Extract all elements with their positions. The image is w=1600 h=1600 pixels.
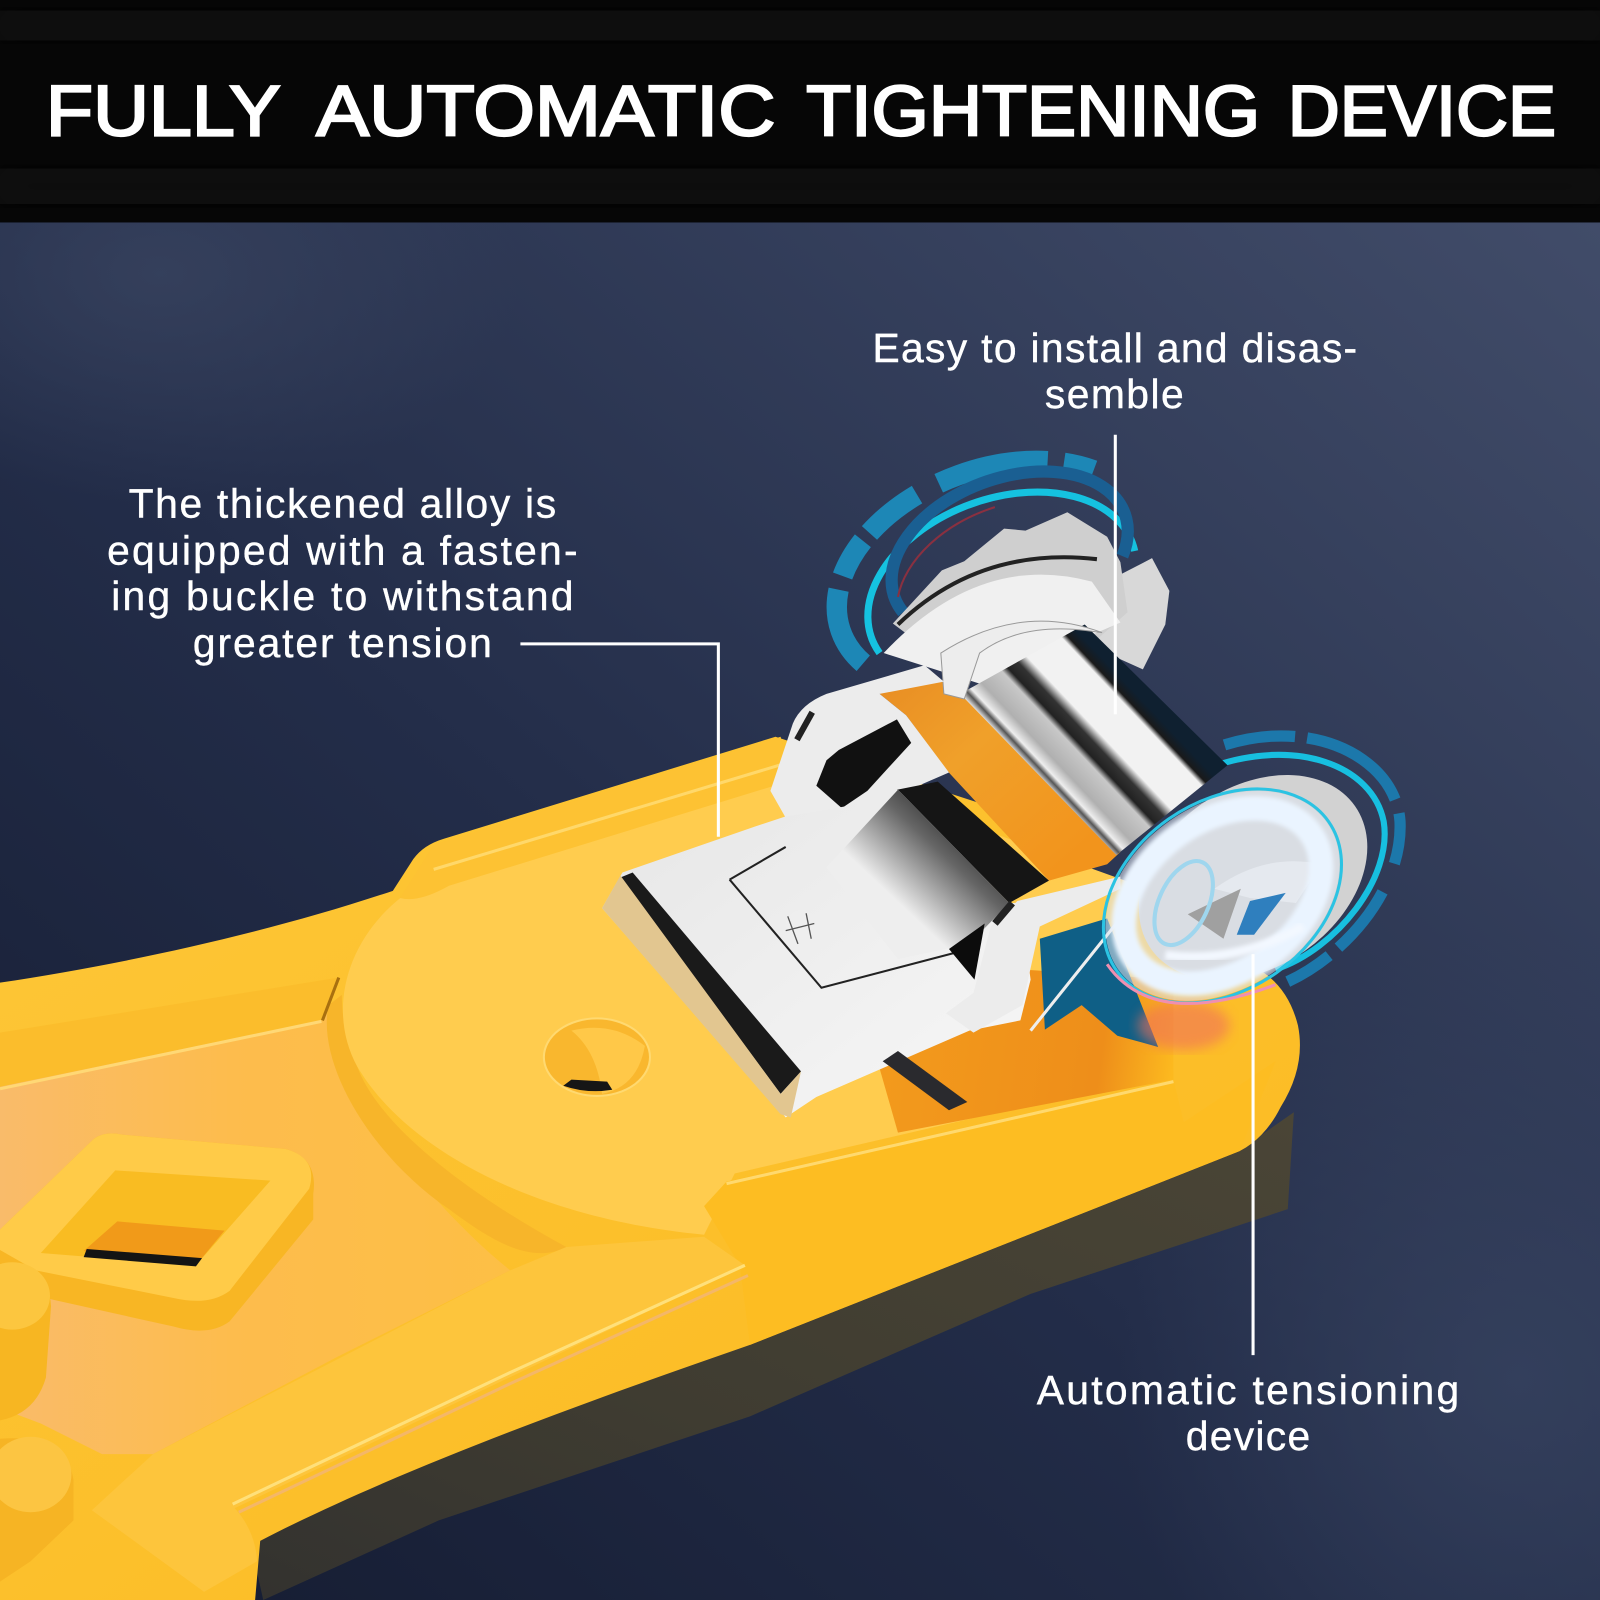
- callout: thickened alloy: [107, 480, 718, 837]
- recessed floor: [0, 1010, 510, 1454]
- inner plate outline: [730, 847, 969, 988]
- disc mounting hole: [544, 1018, 650, 1096]
- plate outline: [0, 737, 1300, 1600]
- callout: automatic tensioning: [1037, 954, 1459, 1459]
- title: [46, 72, 1556, 152]
- title: DEVICE: [1288, 72, 1556, 152]
- glow rings behind the front ratchet: [1210, 736, 1400, 982]
- steel roller: [960, 624, 1228, 855]
- rivet: [786, 910, 816, 944]
- roller collar: [941, 621, 1102, 699]
- callout: easy to install: Easy to install and disas-: [872, 325, 1357, 371]
- lower left rib: [92, 1237, 745, 1592]
- glow rings behind the rear ratchet: [837, 461, 1152, 663]
- black notch: [949, 923, 985, 980]
- rear ratchet wheel: [884, 512, 1169, 684]
- callout: easy to install: semble: [1045, 371, 1184, 417]
- callout: thickened alloy: The thickened alloy is: [129, 480, 556, 526]
- raised disc face: [343, 755, 1173, 1235]
- lower right rib: [704, 1061, 1276, 1345]
- dark end band: [620, 872, 801, 1094]
- pink halo arc: [1107, 964, 1276, 1003]
- dark block shading: [827, 790, 1009, 959]
- orange floor seen through the bracket: [880, 669, 1120, 881]
- callout: thickened alloy: greater tension: [193, 620, 492, 666]
- callout: automatic tensioning: device: [1186, 1413, 1310, 1459]
- title: TIGHTENING: [806, 72, 1260, 152]
- upper peg: [0, 1263, 51, 1420]
- slot in plate: [883, 1051, 967, 1110]
- yellow tool body: [0, 737, 1300, 1600]
- title: FULLY: [46, 72, 281, 152]
- header band: [0, 0, 1600, 222]
- title: AUTOMATIC: [316, 72, 776, 152]
- callout: easy to install: [872, 325, 1357, 714]
- lower bracket arm: [946, 877, 1158, 1047]
- red glow under front ratchet: [1138, 1001, 1230, 1050]
- upper bracket arm: [770, 665, 949, 821]
- callout: thickened alloy: ing buckle to withstand: [111, 573, 573, 619]
- upper left rib: [0, 978, 339, 1087]
- floor under the mechanism: [878, 969, 1173, 1133]
- upper right rib: [400, 737, 791, 899]
- raised disc side: [327, 995, 566, 1253]
- front ratchet wheel with glass halo: [1062, 733, 1407, 1047]
- callout: automatic tensioning: Automatic tensioning: [1037, 1367, 1459, 1413]
- diamond ring: [0, 1134, 314, 1331]
- callout: thickened alloy: equipped with a fasten-: [107, 527, 578, 573]
- steel buckle tongue: [602, 790, 1031, 1117]
- lower peg: [0, 1438, 73, 1582]
- reflection of the tool: [250, 1112, 1294, 1600]
- black gap beside the tongue: [897, 782, 1049, 903]
